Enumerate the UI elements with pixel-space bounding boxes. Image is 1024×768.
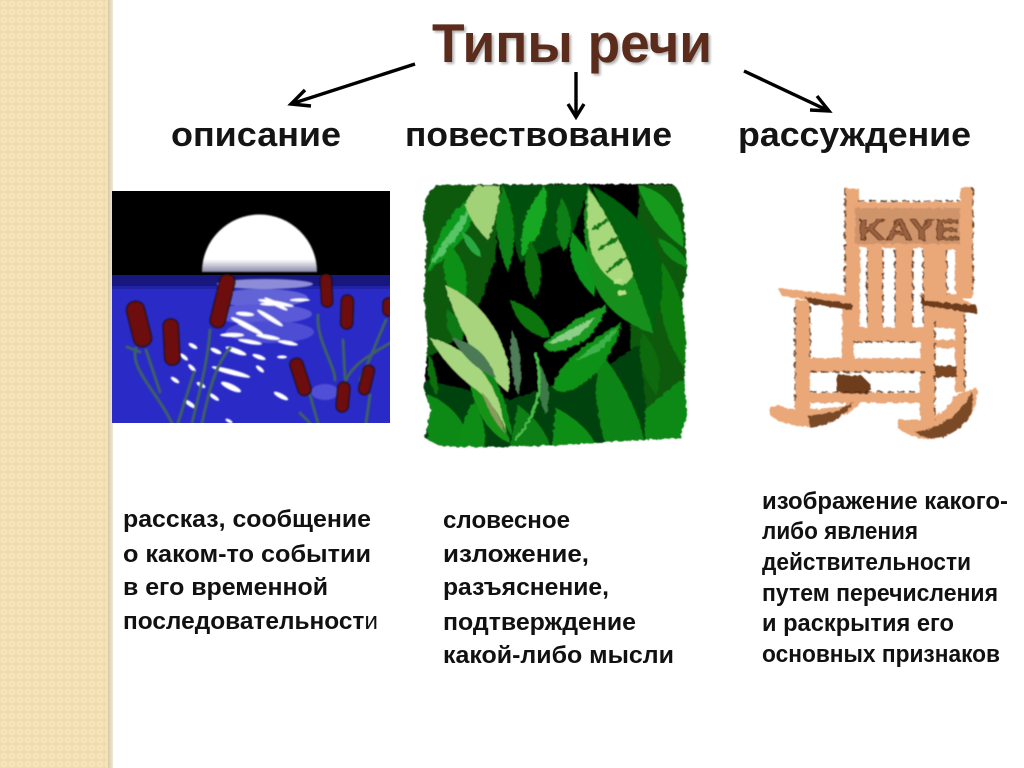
left lower leaf 1 <box>445 285 510 392</box>
top-left light leaf <box>465 186 500 240</box>
center stems <box>515 352 540 440</box>
picture: green leaves <box>420 182 690 450</box>
text block: left column <box>123 506 378 635</box>
heading: повествование: повествование <box>405 116 672 154</box>
top and side blades <box>426 200 472 272</box>
text block: middle column: какой-либо мысли <box>443 642 674 669</box>
text block: right column: основных признаков <box>762 641 1000 668</box>
large right leaf, light side <box>584 186 654 334</box>
chair back name: KAYE <box>858 214 960 247</box>
top rail shade <box>855 208 960 244</box>
moon <box>202 214 317 272</box>
dark green under-layer <box>423 185 690 450</box>
arrow to narration <box>568 72 584 117</box>
text block: right column: путем перечисления <box>762 580 998 607</box>
text block: right column: либо явления <box>762 518 918 545</box>
left lower leaf 2 <box>430 338 508 438</box>
title: Типы речи <box>432 12 712 74</box>
cattail stems <box>127 315 390 423</box>
text block: middle column: разъяснение, <box>443 574 609 601</box>
text block: left column: о каком-то событии <box>123 541 371 568</box>
text block: middle column: словесное <box>443 507 570 534</box>
text block: left column: рассказ, сообщение <box>123 506 371 533</box>
text block: left column: в его временной <box>123 574 328 601</box>
heading: описание: описание <box>171 116 341 154</box>
text block: right column: действительности <box>762 549 971 576</box>
large right leaf, dark side <box>592 186 662 334</box>
grey leaf ribs <box>452 338 496 378</box>
arrow to description <box>291 64 415 106</box>
armrests <box>778 288 855 310</box>
left decorative strip <box>0 0 113 768</box>
back slat gaps <box>860 248 955 327</box>
chair back, rails and posts <box>795 188 973 422</box>
rockers <box>770 397 860 427</box>
cattail heads <box>125 273 395 412</box>
picture: wooden rocking chair <box>770 188 978 439</box>
text block: left column: последовательности <box>123 608 378 635</box>
edge shading <box>795 188 973 420</box>
text block: middle column <box>443 507 674 669</box>
heading: рассуждение: рассуждение <box>738 116 971 154</box>
center leaves <box>543 305 607 352</box>
text block: middle column: изложение, <box>443 541 589 568</box>
text block: right column <box>762 488 1008 668</box>
moon reflections <box>170 279 339 424</box>
text block: middle column: подтверждение <box>443 609 636 636</box>
arrow to reasoning <box>744 71 829 111</box>
picture: moon over water with cattails <box>112 191 395 424</box>
seat gap <box>854 343 918 358</box>
shadow under seat <box>837 374 871 394</box>
text block: right column: и раскрытия его <box>762 610 954 637</box>
text block: right column: изображение какого- <box>762 488 1008 515</box>
title: Типы речи <box>434 14 714 76</box>
